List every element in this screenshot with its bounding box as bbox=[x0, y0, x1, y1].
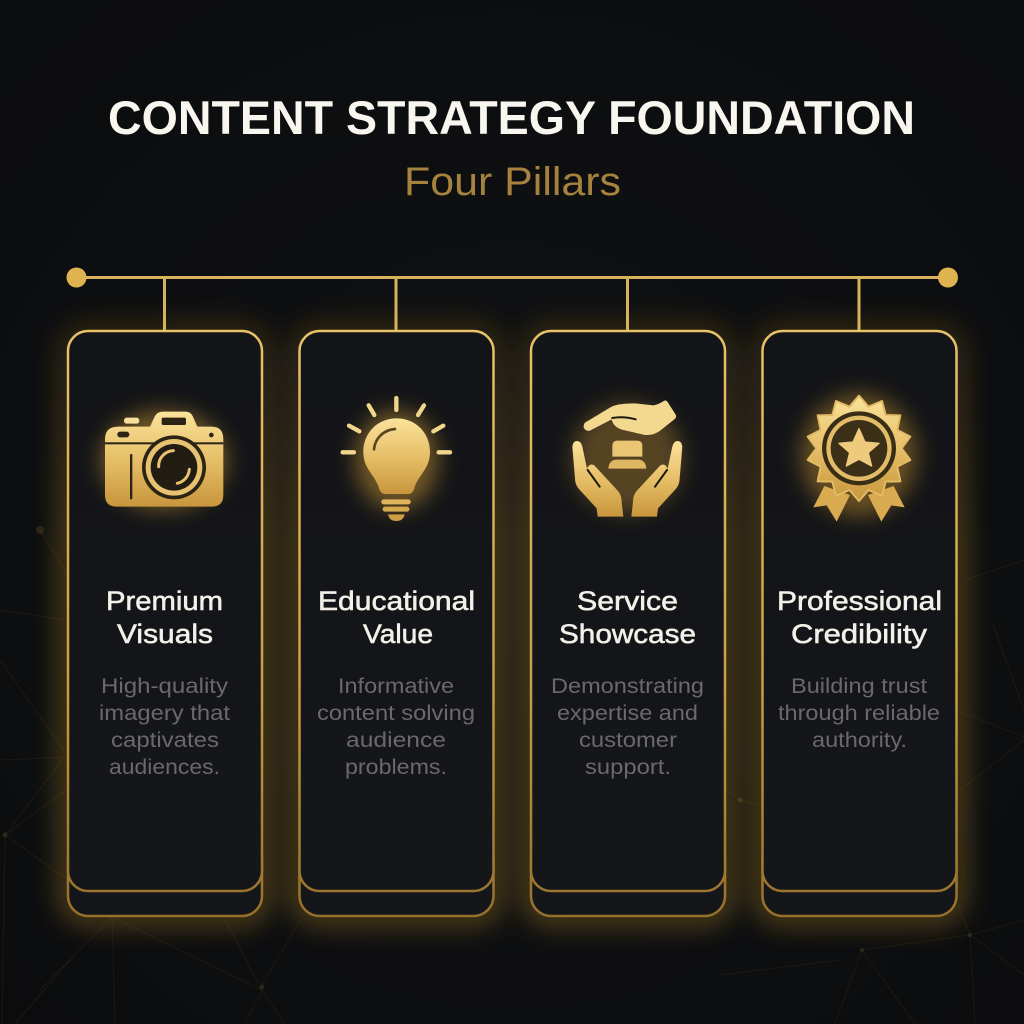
card front bbox=[762, 331, 956, 891]
panel: professional credibility bbox=[762, 331, 956, 916]
icon: camera bbox=[101, 410, 227, 510]
heading: Credibility bbox=[791, 619, 928, 649]
description bbox=[317, 675, 475, 779]
heading: Visuals bbox=[117, 619, 213, 649]
heading bbox=[318, 586, 475, 649]
heading: Showcase bbox=[559, 619, 696, 649]
description: captivates bbox=[111, 729, 219, 752]
description bbox=[778, 675, 940, 752]
icon: award badge bbox=[801, 393, 917, 522]
description: support. bbox=[585, 756, 671, 779]
heading: Premium bbox=[106, 586, 223, 616]
description: High-quality bbox=[101, 675, 229, 698]
panel: premium visuals bbox=[68, 331, 262, 916]
panel: educational value bbox=[300, 331, 494, 916]
card front bbox=[300, 331, 494, 891]
description: customer bbox=[579, 729, 677, 752]
heading: Value bbox=[363, 619, 433, 649]
description: audience bbox=[346, 729, 446, 752]
description bbox=[551, 675, 704, 779]
card front bbox=[531, 331, 725, 891]
description: authority. bbox=[812, 729, 907, 752]
card back plate bbox=[531, 840, 725, 916]
heading bbox=[777, 586, 942, 649]
heading: Educational bbox=[318, 586, 475, 616]
description: imagery that bbox=[99, 702, 230, 725]
heading bbox=[106, 586, 223, 649]
description: Informative bbox=[338, 675, 454, 698]
icon: light bulb bbox=[343, 398, 450, 521]
description: Building trust bbox=[791, 675, 927, 698]
card front bbox=[68, 331, 262, 891]
timeline connector bbox=[66, 268, 958, 331]
description: problems. bbox=[345, 756, 447, 779]
icon: hands and service bell bbox=[572, 400, 682, 517]
description: content solving bbox=[317, 702, 475, 725]
description: audiences. bbox=[109, 756, 220, 779]
description: Demonstrating bbox=[551, 675, 704, 698]
heading bbox=[559, 586, 696, 649]
background network pattern bbox=[0, 530, 1024, 1024]
description bbox=[99, 675, 230, 779]
title: CONTENT STRATEGY FOUNDATION bbox=[108, 91, 915, 144]
card back plate bbox=[68, 840, 262, 916]
card back plate bbox=[762, 840, 956, 916]
card back plate bbox=[300, 840, 494, 916]
heading: Professional bbox=[777, 586, 942, 616]
card glow bbox=[68, 332, 956, 916]
background network nodes bbox=[2, 526, 972, 990]
description: expertise and bbox=[557, 702, 698, 725]
subtitle: Four Pillars bbox=[404, 160, 621, 204]
description: through reliable bbox=[778, 702, 940, 725]
heading: Service bbox=[577, 586, 678, 616]
panel: service showcase bbox=[531, 331, 725, 916]
